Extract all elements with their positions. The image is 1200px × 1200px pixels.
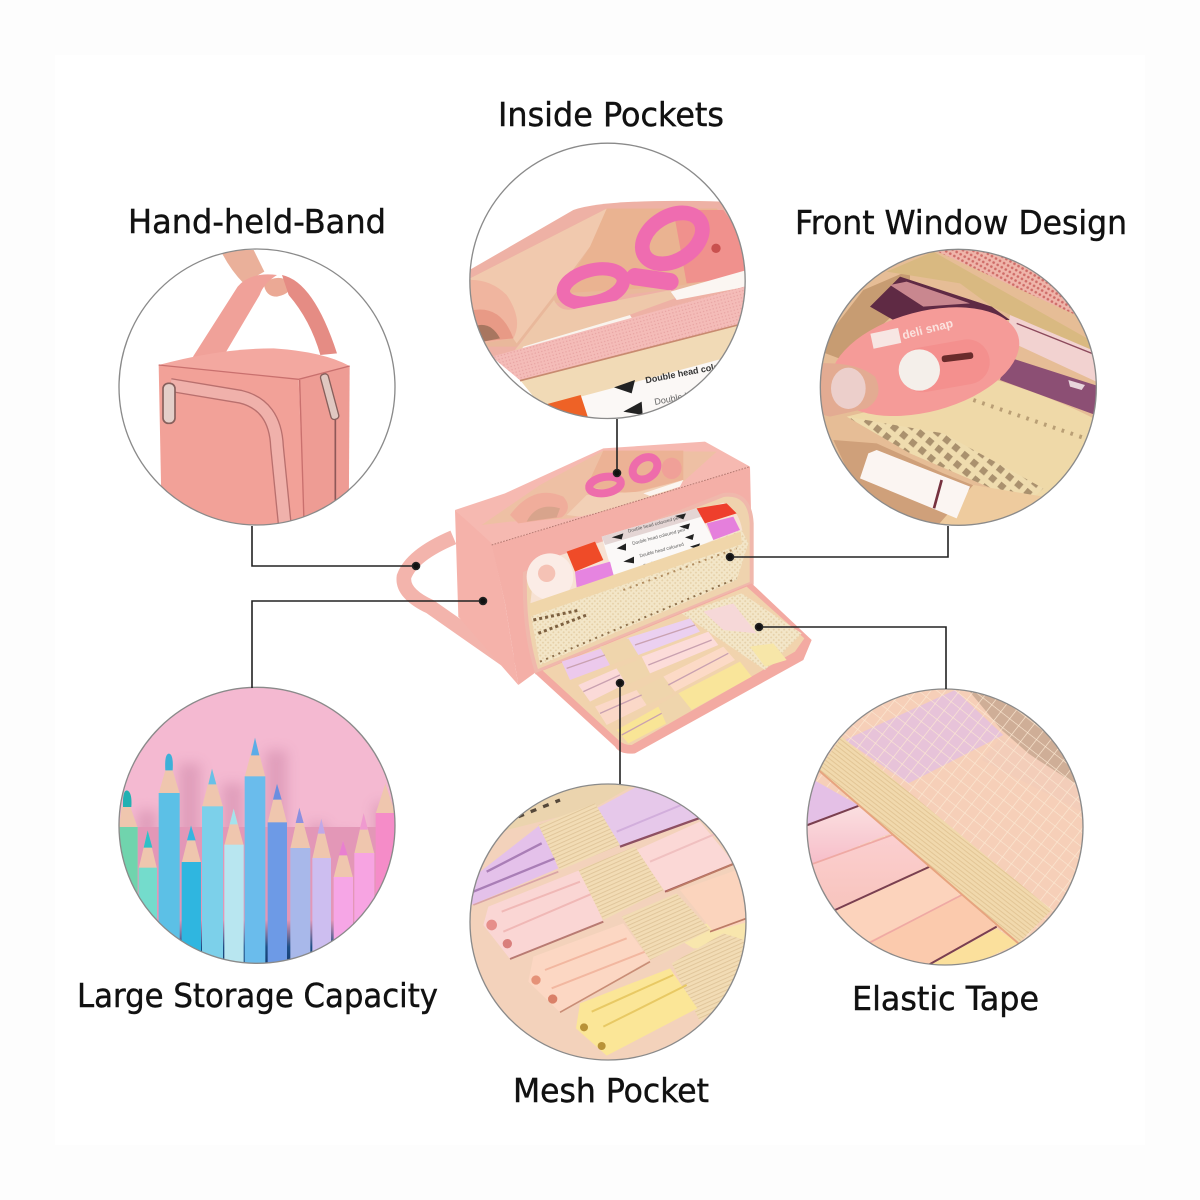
open flap (535, 583, 812, 754)
compartment interior: Double head coloured (639, 542, 685, 558)
circle: front window design detail (820, 248, 1097, 526)
circle: large storage capacity coloured pencils (118, 686, 396, 964)
callout line: hand-held band (252, 526, 420, 570)
icon: pink scissors (560, 202, 712, 309)
white markers (602, 508, 713, 582)
handle (404, 537, 513, 665)
compartment interior (527, 503, 743, 607)
flap pencils (562, 618, 752, 743)
pencils (119, 738, 396, 981)
callout line: front window (726, 526, 948, 560)
window mesh (530, 530, 748, 665)
compartment interior: Double head coloured pen (632, 527, 686, 546)
yellow sticks (576, 968, 697, 1056)
top of pouch (455, 442, 750, 545)
marker label: Double head coloured (644, 357, 739, 385)
callout line: large storage (252, 598, 486, 688)
lavender sticks (472, 785, 707, 905)
pink sticks (483, 822, 735, 959)
circle: elastic tape detail (806, 688, 1084, 966)
mesh pocket (847, 380, 1097, 503)
circle: inside pockets detail (469, 142, 746, 420)
markers in window (870, 277, 1100, 417)
ribbon roll (472, 280, 517, 342)
heading: Hand-held-Band: Hand-held-Band (128, 202, 386, 241)
pink cutter: deli snap (901, 316, 954, 342)
side face (455, 510, 518, 685)
heading: Front Window Design: Front Window Design (795, 203, 1127, 242)
marker label (548, 359, 720, 418)
heading: Mesh Pocket: Mesh Pocket (513, 1071, 709, 1110)
heading: Inside Pockets: Inside Pockets (498, 95, 724, 134)
lower area (834, 440, 1042, 524)
circle: mesh pocket detail (469, 783, 747, 1061)
callout line: elastic tape (756, 624, 946, 689)
peach sticks (528, 863, 748, 1012)
handle strap (193, 274, 337, 357)
callout line: inside pockets (614, 419, 620, 476)
flap elastic bands (600, 638, 638, 665)
flap mesh pocket (682, 593, 802, 670)
thumb (817, 363, 879, 417)
callout line: mesh pocket (616, 680, 624, 784)
ribbon roll (527, 553, 573, 600)
front compartment rim (525, 495, 752, 672)
inner pocket (515, 290, 675, 350)
pouch body (159, 348, 350, 533)
compartment interior: Double head coloured (643, 552, 689, 568)
pink cutter (835, 307, 1020, 416)
zipper band (492, 285, 750, 382)
sticks under the tape (805, 775, 1018, 970)
marker label: Double head (653, 387, 705, 407)
heading: Elastic Tape: Elastic Tape (852, 979, 1039, 1018)
finger (220, 250, 264, 283)
elastic tape band (818, 737, 1052, 943)
compartment interior: Double head coloured pen (627, 515, 682, 534)
heading: Large Storage Capacity: Large Storage Capacity (77, 976, 438, 1015)
central product: pink pencil pouch (404, 442, 812, 754)
elastic bands (538, 803, 750, 1022)
front face (492, 467, 753, 685)
zipper pulls (163, 373, 340, 423)
circle: hand-held band detail (118, 248, 396, 526)
main opening (482, 451, 717, 525)
pencil shadows (134, 747, 379, 827)
